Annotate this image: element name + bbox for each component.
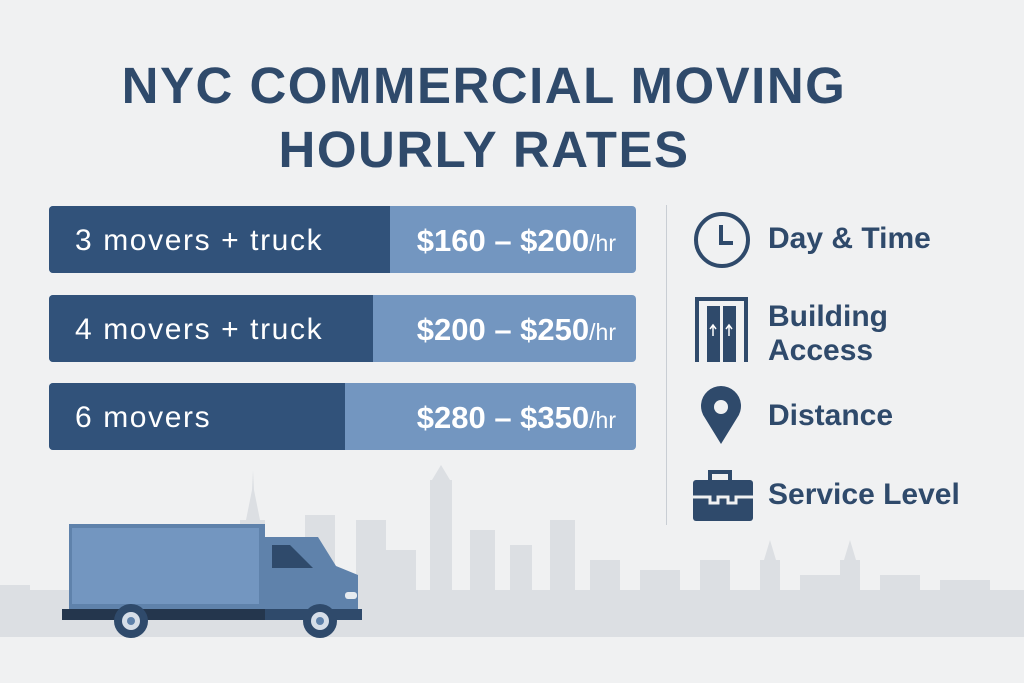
factor: distance: Distance bbox=[768, 399, 893, 432]
bar: 4 movers: 4 movers + truck bbox=[75, 313, 323, 346]
title bbox=[122, 57, 846, 178]
icon: clock bbox=[694, 212, 750, 268]
factor: day & time: Day & Time bbox=[768, 222, 931, 255]
factor: building access bbox=[768, 300, 888, 367]
skyline background bbox=[0, 466, 1024, 637]
bar: 6 movers: $280 – $350/hr bbox=[417, 400, 616, 435]
icon: truck bbox=[62, 524, 362, 638]
factor: building access: Building bbox=[768, 300, 888, 333]
bar: 6 movers bbox=[49, 383, 636, 450]
factor: service level: Service Level bbox=[768, 478, 960, 511]
factor: building access: Access bbox=[768, 334, 873, 367]
bar: 3 movers bbox=[49, 206, 636, 273]
bar: 6 movers: 6 movers bbox=[75, 401, 211, 434]
bar: 4 movers: $200 – $250/hr bbox=[417, 312, 616, 347]
icon: elevator bbox=[695, 297, 748, 362]
bar: 4 movers bbox=[49, 295, 636, 362]
bar: 3 movers: $160 – $200/hr bbox=[417, 223, 616, 258]
icon: toolbox bbox=[693, 470, 753, 521]
bar: 3 movers: 3 movers + truck bbox=[75, 224, 323, 257]
title: NYC COMMERCIAL MOVING bbox=[122, 57, 846, 114]
icon: pin bbox=[701, 386, 741, 444]
title: HOURLY RATES bbox=[279, 121, 689, 178]
